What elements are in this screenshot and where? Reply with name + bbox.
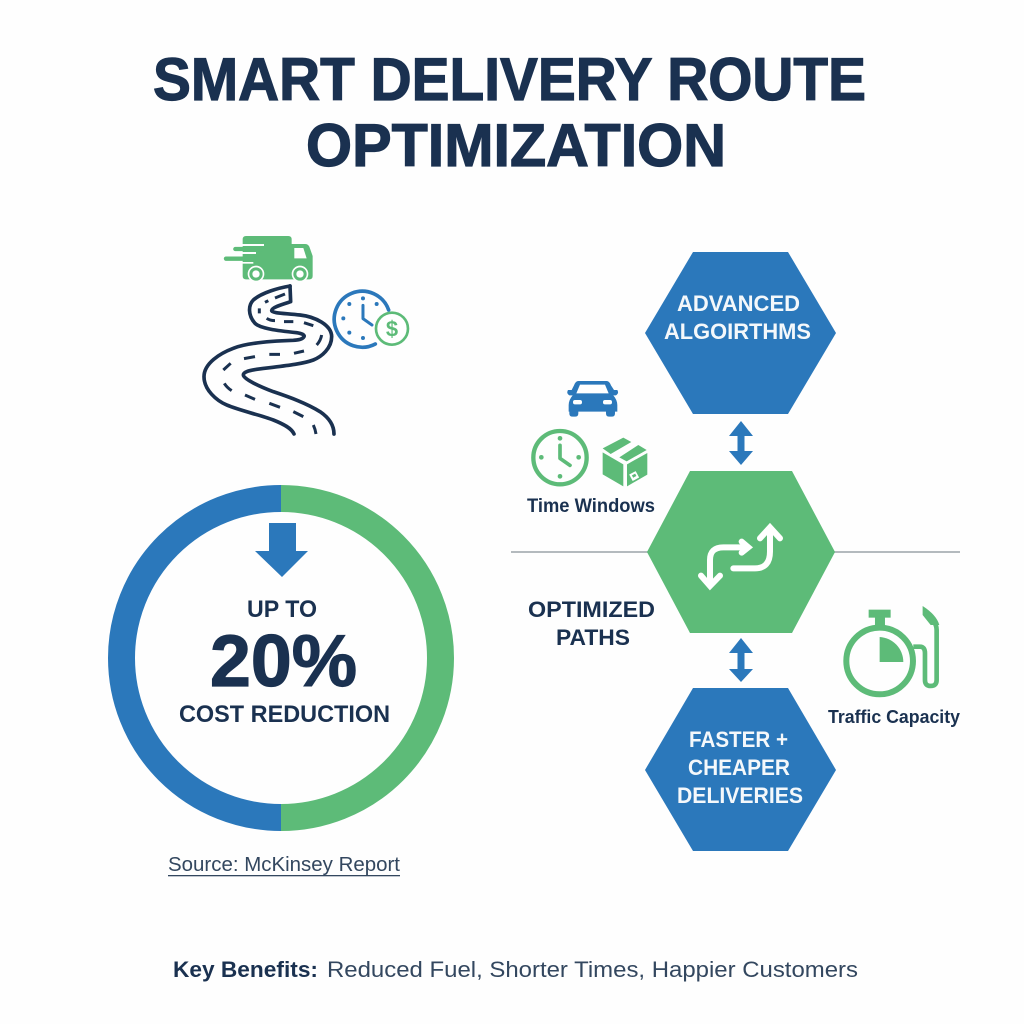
- icon: clock with dollar: $: [386, 317, 398, 342]
- hexagon: faster cheaper deliveries: CHEAPER: [688, 755, 790, 780]
- label: optimized paths: PATHS: [556, 625, 630, 650]
- label: optimized paths: [528, 597, 655, 650]
- arrow: bottom double: [729, 638, 753, 682]
- hexagon: advanced algorithms: ALGOIRTHMS: [664, 319, 811, 344]
- donut text: COST REDUCTION: [179, 701, 390, 728]
- hexagon: optimized routes: [647, 471, 835, 633]
- label: traffic capacity: Traffic Capacity: [828, 707, 960, 727]
- donut text: UP TO: [247, 596, 317, 623]
- label: time windows: Time Windows: [527, 496, 655, 517]
- arrow: top double: [729, 421, 753, 465]
- donut text: [179, 596, 390, 728]
- icon: car: [567, 381, 618, 417]
- icon: package box: [603, 438, 647, 486]
- key benefits line: Key Benefits:: [173, 957, 318, 982]
- icon: delivery truck: [226, 236, 313, 282]
- icon: green clock: [533, 431, 587, 484]
- title: [153, 46, 866, 179]
- icon: clock with dollar: [334, 291, 408, 347]
- icon: stopwatch with fuel pump: [846, 606, 939, 694]
- donut ring: [122, 498, 440, 818]
- hexagon: advanced algorithms: ADVANCED: [677, 291, 800, 316]
- icon: down arrow: [255, 523, 308, 577]
- key benefits line: Reduced Fuel, Shorter Times, Happier Customers: [327, 957, 858, 982]
- hexagon: faster cheaper deliveries: [645, 688, 836, 851]
- icon: winding road: [204, 286, 334, 434]
- title: SMART DELIVERY ROUTE: [153, 46, 866, 113]
- hexagon: faster cheaper deliveries: DELIVERIES: [677, 783, 803, 808]
- divider lines: [511, 551, 960, 553]
- icon: route arrows: [701, 527, 780, 586]
- title: OPTIMIZATION: [306, 112, 726, 179]
- donut text: 20%: [210, 621, 357, 702]
- source link: Source: McKinsey Report: [168, 853, 400, 876]
- hexagon: faster cheaper deliveries: FASTER +: [689, 727, 788, 752]
- label: optimized paths: OPTIMIZED: [528, 597, 655, 622]
- hexagon: advanced algorithms: [645, 252, 836, 414]
